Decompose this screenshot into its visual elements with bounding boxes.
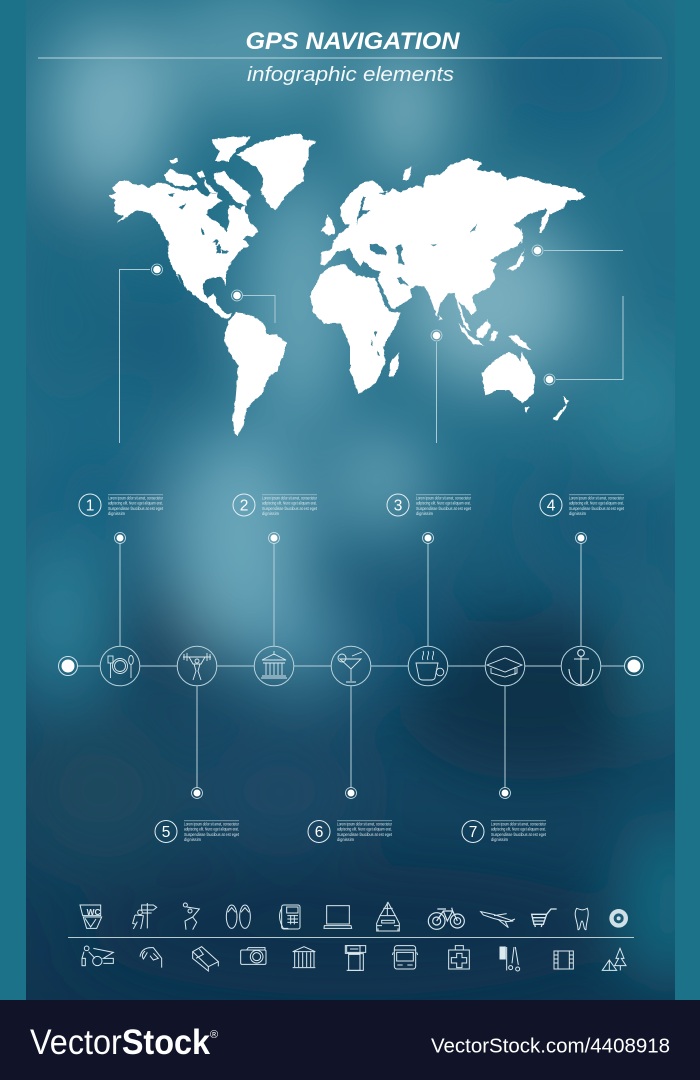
callout 4: Lorem ipsum dolor sit amet, consectetur <box>569 496 624 500</box>
icon: medical kit <box>449 946 469 969</box>
icon: hiker with signpost <box>133 903 157 929</box>
eurasia, africa, oceania <box>310 158 585 420</box>
icon: laptop <box>324 906 352 928</box>
callout 2: Lorem ipsum dolor sit amet, consectetur <box>262 496 317 500</box>
icon: shopping cart <box>532 909 557 927</box>
icon: ATM right half <box>347 946 366 970</box>
footer registered mark: ® <box>210 1029 218 1041</box>
icon: WC toilet: WC <box>87 907 101 917</box>
stem node 5 <box>192 788 202 798</box>
icon: taxi <box>377 902 399 931</box>
icon: coffee cup <box>416 651 444 680</box>
icon: tooth <box>575 908 588 930</box>
callout 3: adipiscing elit. Nunc eget aliquam erat. <box>416 501 471 506</box>
stem node 7 <box>500 788 510 798</box>
callout 2: Suspendisse faucibus at est eget <box>262 506 318 511</box>
numbered callouts <box>79 494 625 842</box>
icon: flip flops <box>226 905 250 928</box>
callout 3 <box>387 494 472 516</box>
callout 3: dignissim <box>416 511 433 516</box>
icon: film strip <box>554 951 573 969</box>
callout 4: dignissim <box>569 511 586 516</box>
americas <box>109 134 317 436</box>
icon: camera <box>241 948 266 964</box>
callout 1: adipiscing elit. Nunc eget aliquam erat. <box>108 501 163 506</box>
icon: airplane <box>481 912 515 928</box>
icon: bank <box>261 651 287 678</box>
icon: fuel nozzle <box>140 948 162 968</box>
callout 7: Suspendisse faucibus at est eget <box>491 832 547 837</box>
stem node 4 <box>576 532 586 544</box>
stem node 2 <box>268 532 280 544</box>
callout 1 <box>79 494 164 516</box>
callout 1: 1 <box>86 498 94 514</box>
callout 7: dignissim <box>491 837 508 842</box>
callout 2: dignissim <box>262 511 279 516</box>
timeline <box>78 543 624 788</box>
pin 1 <box>152 264 162 275</box>
footer url: VectorStock.com/4408918 <box>431 1036 670 1058</box>
pin 2 <box>232 290 242 301</box>
icon: WC toilet <box>80 905 102 928</box>
connector: Caribbean <box>243 296 275 323</box>
icon: tent and tree <box>602 948 626 970</box>
icon row divider <box>68 937 634 938</box>
pin 5 <box>544 374 555 385</box>
callout 5: adipiscing elit. Nunc eget aliquam erat. <box>184 827 239 832</box>
pin 3 <box>431 330 442 341</box>
callout 5: Lorem ipsum dolor sit amet, consectetur <box>184 822 239 826</box>
icon: weightlifter <box>183 653 211 680</box>
icon: discus thrower <box>183 903 199 930</box>
icon: tyre <box>609 909 628 928</box>
timeline start node <box>58 656 78 676</box>
connector: Indian Ocean <box>436 342 438 443</box>
callout 2 <box>233 494 318 516</box>
callout 3: Lorem ipsum dolor sit amet, consectetur <box>416 496 471 500</box>
callout 6: 6 <box>315 824 323 841</box>
icon: plate and cutlery <box>108 656 133 678</box>
icon: mechanic and car <box>82 946 113 966</box>
icon: cocktail <box>338 652 362 682</box>
callout 7 <box>462 820 547 842</box>
icon: graduation cap <box>487 658 522 677</box>
callout 5: 5 <box>162 824 170 841</box>
icon: desk phone <box>280 905 300 929</box>
stem node 6 <box>346 788 356 798</box>
callout 3: Suspendisse faucibus at est eget <box>416 506 472 511</box>
callout 1: Suspendisse faucibus at est eget <box>108 506 164 511</box>
footer band <box>0 1000 700 1080</box>
icon: bicycle <box>428 908 464 929</box>
connector: Australia <box>556 296 623 380</box>
callout 2: adipiscing elit. Nunc eget aliquam erat. <box>262 501 317 506</box>
stem nodes <box>114 532 586 798</box>
callout 2: 2 <box>240 498 248 514</box>
footer logo: VectorStock <box>30 1023 210 1062</box>
stem node 3 <box>422 532 434 544</box>
callout 5 <box>155 820 240 842</box>
connector: Japan <box>544 250 623 252</box>
callout 1: Lorem ipsum dolor sit amet, consectetur <box>108 496 163 500</box>
callout 4: adipiscing elit. Nunc eget aliquam erat. <box>569 501 624 506</box>
callout 4 <box>540 494 625 516</box>
icon: anchor <box>569 650 593 685</box>
callout 6 <box>308 820 393 842</box>
map connectors <box>120 250 623 443</box>
icon set left <box>80 903 360 971</box>
callout 1: dignissim <box>108 511 125 516</box>
callout 4: Suspendisse faucibus at est eget <box>569 506 625 511</box>
callout 5: dignissim <box>184 837 201 842</box>
pin 4 <box>532 245 543 256</box>
callout 7: 7 <box>469 824 477 841</box>
callout 6: dignissim <box>337 837 354 842</box>
icon: ATM <box>345 946 360 970</box>
icon set right <box>347 902 628 971</box>
icon: comb and scissors <box>500 947 520 971</box>
callout 3: 3 <box>394 498 402 514</box>
stem node 1 <box>114 532 126 544</box>
callout 6: Suspendisse faucibus at est eget <box>337 832 393 837</box>
title: GPS NAVIGATION <box>246 28 460 55</box>
callout 7: Lorem ipsum dolor sit amet, consectetur <box>491 822 546 826</box>
timeline icons <box>108 650 593 685</box>
callout 5: Suspendisse faucibus at est eget <box>184 832 240 837</box>
icon: bank building <box>293 947 315 968</box>
connector: America north <box>120 270 150 443</box>
callout 4: 4 <box>547 498 556 514</box>
world map <box>109 134 585 436</box>
icon: bed <box>193 947 218 971</box>
callout 7: adipiscing elit. Nunc eget aliquam erat. <box>491 827 546 832</box>
title rule <box>38 58 662 59</box>
subtitle: infographic elements <box>247 64 454 86</box>
icon: bus <box>392 946 418 969</box>
timeline end node <box>624 656 644 676</box>
callout 6: Lorem ipsum dolor sit amet, consectetur <box>337 822 392 826</box>
map pins <box>152 245 555 385</box>
callout 6: adipiscing elit. Nunc eget aliquam erat. <box>337 827 392 832</box>
